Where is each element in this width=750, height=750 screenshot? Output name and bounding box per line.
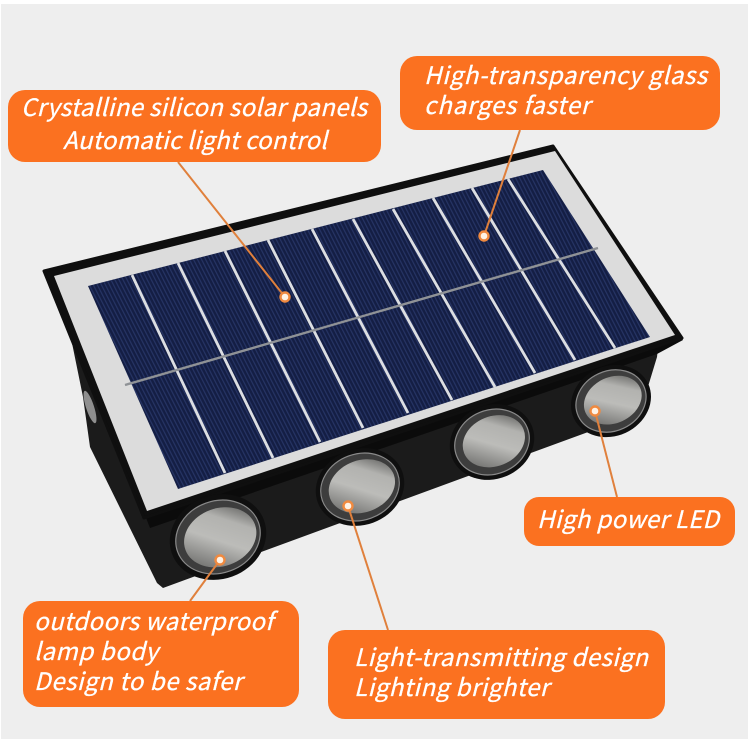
leader: solar panels [178,162,290,302]
black panel frame [44,146,682,518]
leader: waterproof body [190,556,224,601]
callout: solar panels [8,88,381,162]
callout: light transmitting [328,630,665,719]
product: solar wall lamp [44,146,683,593]
cell gaps [132,179,615,473]
callout: waterproof body: lamp body [34,632,161,667]
lens 4 [559,352,663,450]
callout: glass: High-transparency glass [424,56,709,91]
front frame band [143,335,683,528]
solar cells [88,170,650,489]
leader: glass [480,130,520,240]
leader: light transmitting [344,502,388,630]
callout: light transmitting: Lighting brighter [354,668,553,703]
callout: glass [400,56,720,130]
callout: waterproof body [23,601,299,707]
callout: glass: charges faster [424,86,594,121]
callout: LED: High power LED [537,500,721,535]
callout: waterproof body: Design to be safer [34,662,246,697]
leader: LED [590,406,617,497]
callout: solar panels: Automatic light control [63,121,330,156]
lens 1 [158,481,278,593]
callout: LED [524,497,735,546]
lens 3 [438,392,546,492]
callout: light transmitting: Light-transmitting design [354,638,649,673]
side lens [81,390,99,424]
lamp body [72,330,660,588]
callout: waterproof body: outdoors waterproof [34,602,279,637]
lens 2 [305,436,415,538]
white glass cover [54,151,675,511]
bus bar [125,248,598,385]
callout: solar panels: Crystalline silicon solar panels [21,88,369,123]
